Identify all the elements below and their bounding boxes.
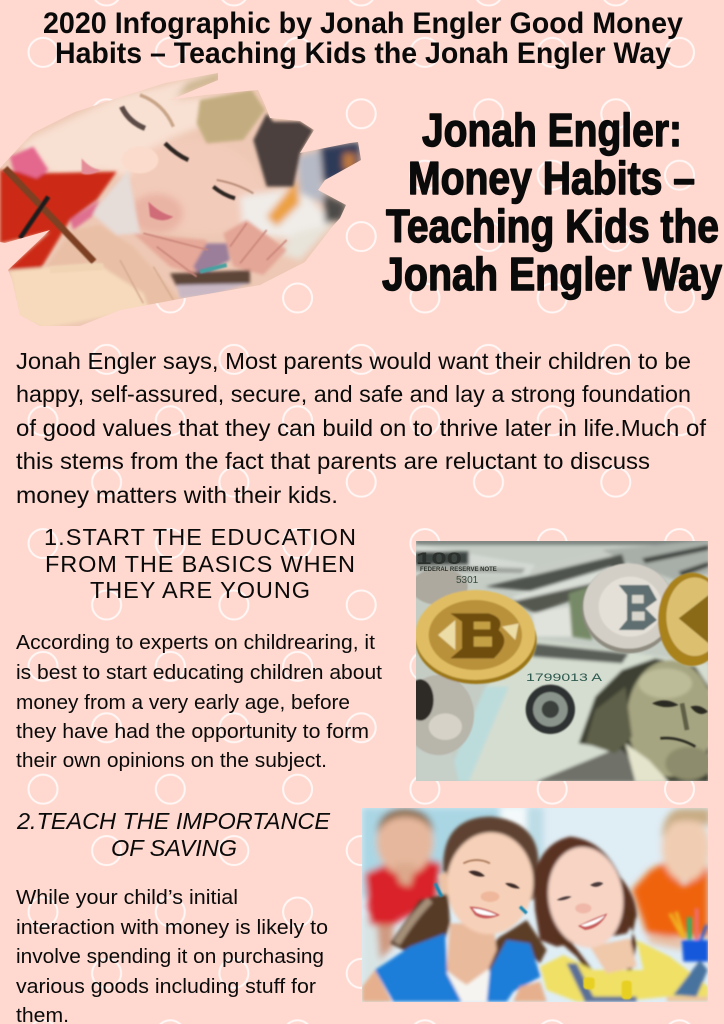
intro paragraph: happy, self-assured, secure, and safe and lay a strong foundation	[16, 381, 691, 407]
section 1 paragraph	[16, 632, 382, 772]
section 1 paragraph: they have had the opportunity to form	[16, 721, 369, 743]
photo: bitcoins on dollar bills: 5301	[456, 575, 479, 586]
section 2 paragraph: interaction with money is likely to	[16, 917, 328, 939]
photo: bitcoins on dollar bills	[416, 541, 708, 781]
title	[43, 7, 684, 70]
intro paragraph: of good values that they can build on to thrive later in life.Much of	[16, 415, 707, 441]
section 1 heading: FROM THE BASICS WHEN	[45, 551, 355, 577]
section 2 paragraph: involve spending it on purchasing	[16, 946, 324, 968]
section 1 heading	[44, 524, 356, 603]
section 1 heading: 1.START THE EDUCATION	[44, 524, 356, 550]
section 2 heading: 2.TEACH THE IMPORTANCE	[16, 808, 330, 834]
section 2 paragraph: While your child’s initial	[16, 887, 238, 909]
title: 2020 Infographic by Jonah Engler Good Money	[43, 7, 684, 40]
intro paragraph: this stems from the fact that parents are reluctant to discuss	[16, 448, 650, 474]
section 2 heading: OF SAVING	[111, 835, 237, 861]
intro paragraph: Jonah Engler says, Most parents would want their children to be	[16, 348, 691, 374]
title: Habits – Teaching Kids the Jonah Engler Way	[55, 37, 672, 70]
section 2 heading	[16, 808, 330, 861]
intro paragraph: money matters with their kids.	[16, 482, 338, 508]
intro paragraph	[16, 348, 707, 508]
photo: bitcoins on dollar bills: 1799013 A	[526, 672, 603, 684]
section 2 paragraph	[16, 887, 328, 1024]
photo: smiling school children	[362, 807, 710, 1003]
section 2 paragraph: various goods including stuff for	[16, 976, 316, 998]
section 1 paragraph: money from a very early age, before	[16, 692, 350, 714]
display heading: Jonah Engler:	[422, 104, 682, 156]
photo: bitcoins on dollar bills: FEDERAL RESERVE NOTE	[420, 567, 497, 573]
section 1 paragraph: is best to start educating children about	[16, 662, 382, 684]
section 1 heading: THEY ARE YOUNG	[90, 577, 310, 603]
photo: bitcoins on dollar bills: 100	[416, 549, 462, 568]
photo: two children drawing in brush-stroke frame	[0, 67, 363, 333]
section 1 paragraph: According to experts on childrearing, it	[16, 632, 375, 654]
display heading	[382, 104, 722, 300]
section 1 paragraph: their own opinions on the subject.	[16, 750, 327, 772]
